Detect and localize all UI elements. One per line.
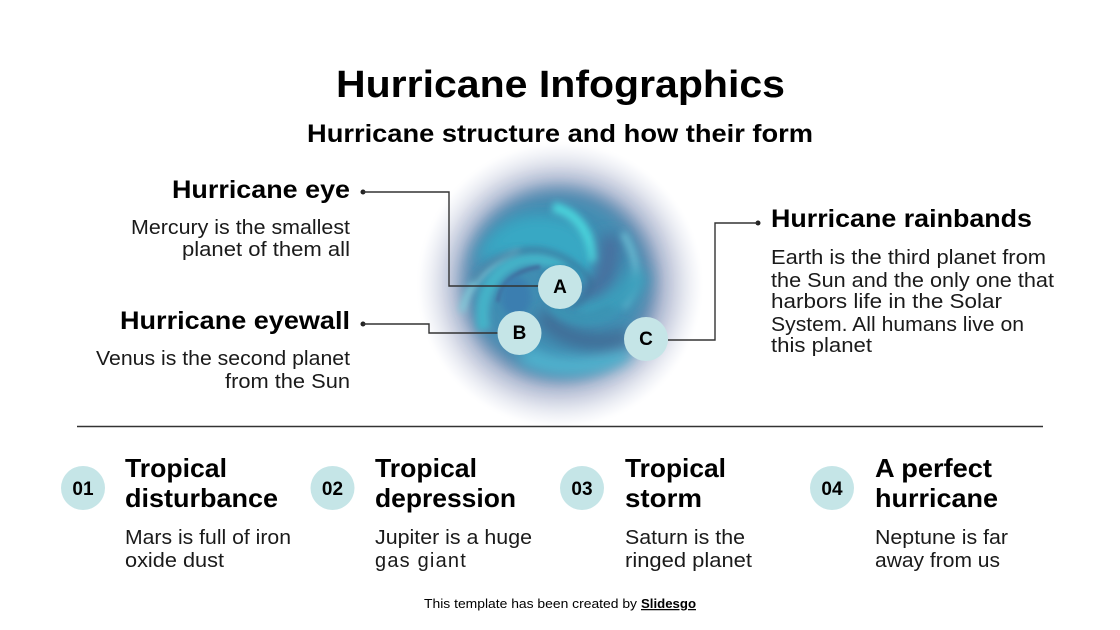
- hurricane swirl illustration: [415, 140, 705, 430]
- footer credit: Slidesgo: [641, 597, 696, 611]
- stage 02: [310, 453, 532, 572]
- marker C: C: [639, 329, 653, 350]
- stage 03: Tropical: [625, 453, 726, 483]
- subtitle: Hurricane structure and how their form: [307, 120, 813, 148]
- stage 01: oxide dust: [125, 550, 224, 572]
- leader line: rainbands: [668, 220, 760, 340]
- text block: hurricane rainbands: harbors life in the Solar: [771, 291, 1002, 313]
- text block: hurricane eyewall: Hurricane eyewall: [120, 307, 350, 335]
- marker A: A: [553, 277, 567, 298]
- text block: hurricane rainbands: System. All humans live on: [771, 314, 1024, 336]
- leader line: eye: [360, 190, 540, 286]
- stage 02: Jupiter is a huge: [375, 527, 532, 549]
- marker B: B: [513, 323, 526, 344]
- text block: hurricane eyewall: from the Sun: [225, 371, 350, 393]
- text block: hurricane eye: Mercury is the smallest: [131, 217, 350, 239]
- stage 04: hurricane: [875, 483, 998, 513]
- leader line: eyewall: [360, 322, 498, 333]
- marker A: [538, 265, 582, 309]
- text block: hurricane rainbands: this planet: [771, 335, 872, 357]
- stage 02: Tropical: [375, 453, 477, 483]
- stage 04: away from us: [875, 550, 1000, 572]
- text block: hurricane rainbands: Hurricane rainbands: [771, 205, 1032, 233]
- stage 01: Tropical: [125, 453, 227, 483]
- stage 01: 01: [72, 479, 94, 500]
- footer credit: This template has been created by: [424, 597, 638, 611]
- stage 04: A perfect: [875, 453, 992, 483]
- text block: hurricane eye: planet of them all: [182, 239, 350, 261]
- stage 02: gas giant: [375, 550, 467, 572]
- stage 02: depression: [375, 483, 516, 513]
- stage 04: [810, 453, 1008, 572]
- stage 03: [560, 453, 752, 572]
- stage 01: [61, 453, 291, 572]
- title: Hurricane Infographics: [336, 64, 785, 106]
- stage 01: disturbance: [125, 483, 278, 513]
- stage 03: 03: [571, 479, 593, 500]
- text block: hurricane eye: Hurricane eye: [172, 176, 350, 204]
- stage 04: Neptune is far: [875, 527, 1008, 549]
- stage 03: ringed planet: [625, 550, 752, 572]
- text block: hurricane eye: [131, 176, 350, 261]
- stage 03: Saturn is the: [625, 527, 745, 549]
- text block: hurricane rainbands: the Sun and the only one that: [771, 270, 1054, 292]
- stage 04: 04: [821, 479, 843, 500]
- marker C: [624, 317, 668, 361]
- stage 02: 02: [322, 479, 343, 500]
- stage 01: Mars is full of iron: [125, 527, 291, 549]
- marker B: [498, 311, 542, 355]
- text block: hurricane eyewall: Venus is the second planet: [96, 348, 350, 370]
- text block: hurricane rainbands: [771, 205, 1054, 357]
- stage 03: storm: [625, 483, 702, 513]
- text block: hurricane eyewall: [96, 307, 350, 393]
- text block: hurricane rainbands: Earth is the third planet from: [771, 247, 1046, 269]
